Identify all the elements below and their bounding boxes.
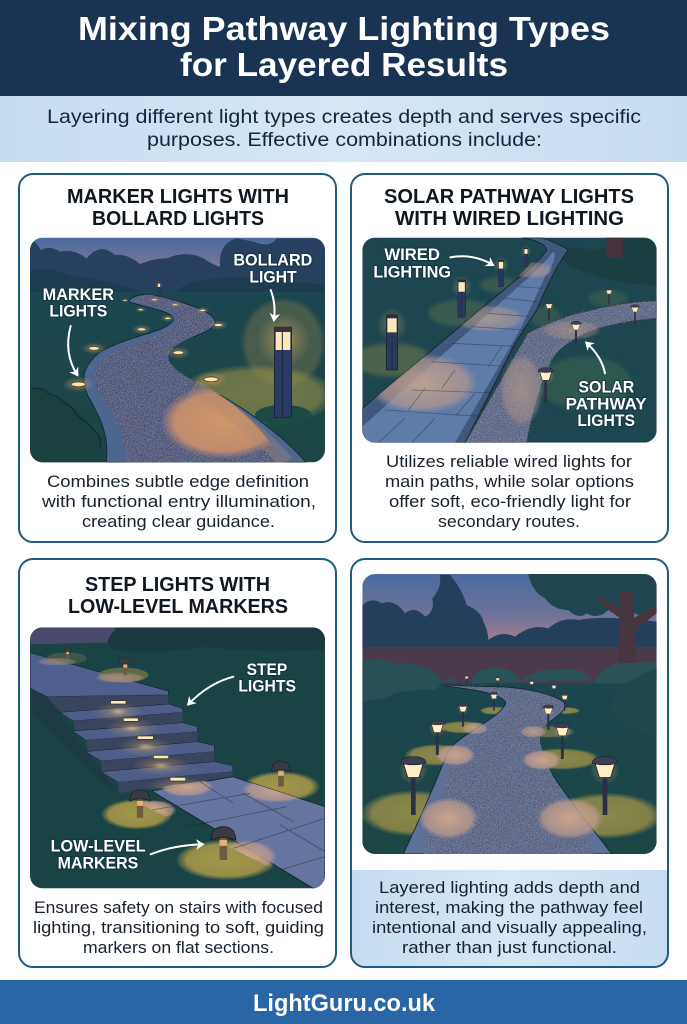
heading: step lights: STEP LIGHTS WITH	[85, 574, 270, 596]
heading: step lights: LOW-LEVEL MARKERS	[68, 596, 288, 618]
intro band: purposes. Effective combinations include:	[147, 129, 542, 151]
arrow: to wired light	[450, 256, 493, 265]
label: solar pathway lights	[566, 378, 647, 430]
light pools on grass	[47, 652, 319, 880]
lower walkway	[130, 777, 325, 888]
description: marker lights	[41, 472, 316, 531]
marker lights	[62, 297, 228, 392]
label: wired lighting: WIRED	[384, 245, 440, 264]
paved path	[362, 238, 568, 443]
intro band	[0, 96, 687, 162]
description: solar with wired: secondary routes.	[438, 512, 580, 531]
label: bollard light	[233, 251, 312, 287]
panel: layered lighting result	[351, 559, 668, 967]
header banner	[0, 0, 687, 96]
label: step lights	[238, 660, 296, 696]
description: marker lights: creating clear guidance.	[82, 512, 275, 531]
upper path light pools	[95, 672, 145, 683]
description: marker lights: Combines subtle edge definition	[47, 472, 309, 491]
callout text: Layered lighting adds depth and	[379, 878, 640, 897]
gravel branch	[465, 301, 657, 443]
footer	[0, 980, 687, 1024]
tree trunk	[595, 592, 657, 664]
callout text: rather than just functional.	[402, 938, 617, 957]
heading: solar with wired	[384, 186, 634, 230]
label: wired lighting: LIGHTING	[373, 262, 451, 281]
description: step lights: Ensures safety on stairs with focused	[34, 898, 323, 917]
label: bollard light: BOLLARD	[233, 251, 312, 270]
heading: solar with wired: SOLAR PATHWAY LIGHTS	[384, 186, 634, 208]
garden wall	[362, 647, 657, 685]
bollard light	[260, 316, 308, 418]
illustration: paved path and gravel branch	[352, 238, 657, 443]
intro band: Layering different light types creates depth and serves specific	[47, 106, 641, 128]
distant bollard	[156, 282, 162, 296]
arrow: to bollard	[271, 290, 275, 320]
description: solar with wired	[385, 452, 634, 531]
callout text	[372, 878, 647, 957]
label: marker lights: LIGHTS	[49, 302, 107, 321]
wired bollards	[376, 245, 531, 370]
wall	[30, 688, 118, 793]
solar lamps	[537, 288, 640, 403]
heading: step lights	[68, 574, 288, 618]
pools of light on lawn	[362, 707, 662, 838]
panel: step lights with low-level markers	[19, 559, 336, 967]
gravel path with curbs	[403, 686, 612, 854]
low-level markers	[63, 648, 290, 860]
callout text: interest, making the pathway feel	[375, 898, 643, 917]
description: step lights: markers on flat sections.	[83, 938, 274, 957]
description: step lights: lighting, transitioning to soft, guiding	[33, 918, 324, 937]
step light fixtures	[111, 701, 186, 781]
callout background	[351, 870, 668, 967]
arrow: to steps	[188, 677, 233, 704]
heading: marker lights	[67, 186, 289, 230]
label: marker lights: MARKER	[43, 285, 114, 304]
label: wired lighting	[373, 245, 451, 281]
label: bollard light: LIGHT	[249, 268, 297, 287]
shrubs	[443, 662, 657, 683]
label: low-level markers: MARKERS	[58, 853, 138, 872]
label: solar pathway lights: PATHWAY	[566, 394, 647, 413]
heading: solar with wired: WITH WIRED LIGHTING	[395, 208, 624, 230]
lawn	[362, 683, 657, 854]
panel: solar with wired	[351, 174, 668, 542]
description: step lights	[33, 898, 324, 957]
title	[78, 11, 610, 84]
illustration: curving path with markers and bollard	[30, 238, 337, 462]
label: solar pathway lights: SOLAR	[578, 378, 634, 397]
footer: LightGuru.co.uk	[253, 990, 436, 1017]
arrow: to marker	[151, 844, 203, 854]
label: step lights: STEP	[247, 660, 287, 679]
label: low-level markers	[51, 837, 146, 872]
staircase	[47, 695, 233, 797]
heading: marker lights: BOLLARD LIGHTS	[92, 208, 264, 230]
shrub and trunk	[563, 238, 657, 285]
description: solar with wired: Utilizes reliable wired lights for	[386, 452, 632, 471]
title: for Layered Results	[180, 47, 508, 84]
title: Mixing Pathway Lighting Types	[78, 11, 610, 48]
illustration: layered garden path	[362, 574, 662, 854]
illustration: stairs and walkway	[30, 627, 325, 888]
callout text: intentional and visually appealing,	[372, 918, 647, 937]
arrow: to marker	[68, 326, 77, 375]
description: solar with wired: main paths, while solar options	[385, 472, 634, 491]
background trees	[362, 574, 657, 650]
label: marker lights	[43, 285, 114, 321]
label: low-level markers: LOW-LEVEL	[51, 837, 146, 856]
description: marker lights: with functional entry illumination,	[41, 492, 316, 511]
upper landing	[30, 653, 168, 697]
path with curb	[84, 294, 306, 462]
description: solar with wired: offer soft, eco-friendly light for	[389, 492, 631, 511]
solar path lamps	[399, 675, 620, 815]
arrow: to solar light	[586, 343, 605, 373]
label: step lights: LIGHTS	[238, 677, 296, 696]
label: solar pathway lights: LIGHTS	[577, 411, 635, 430]
panel: marker lights with bollard lights	[19, 174, 337, 542]
heading: marker lights: MARKER LIGHTS WITH	[67, 186, 289, 208]
